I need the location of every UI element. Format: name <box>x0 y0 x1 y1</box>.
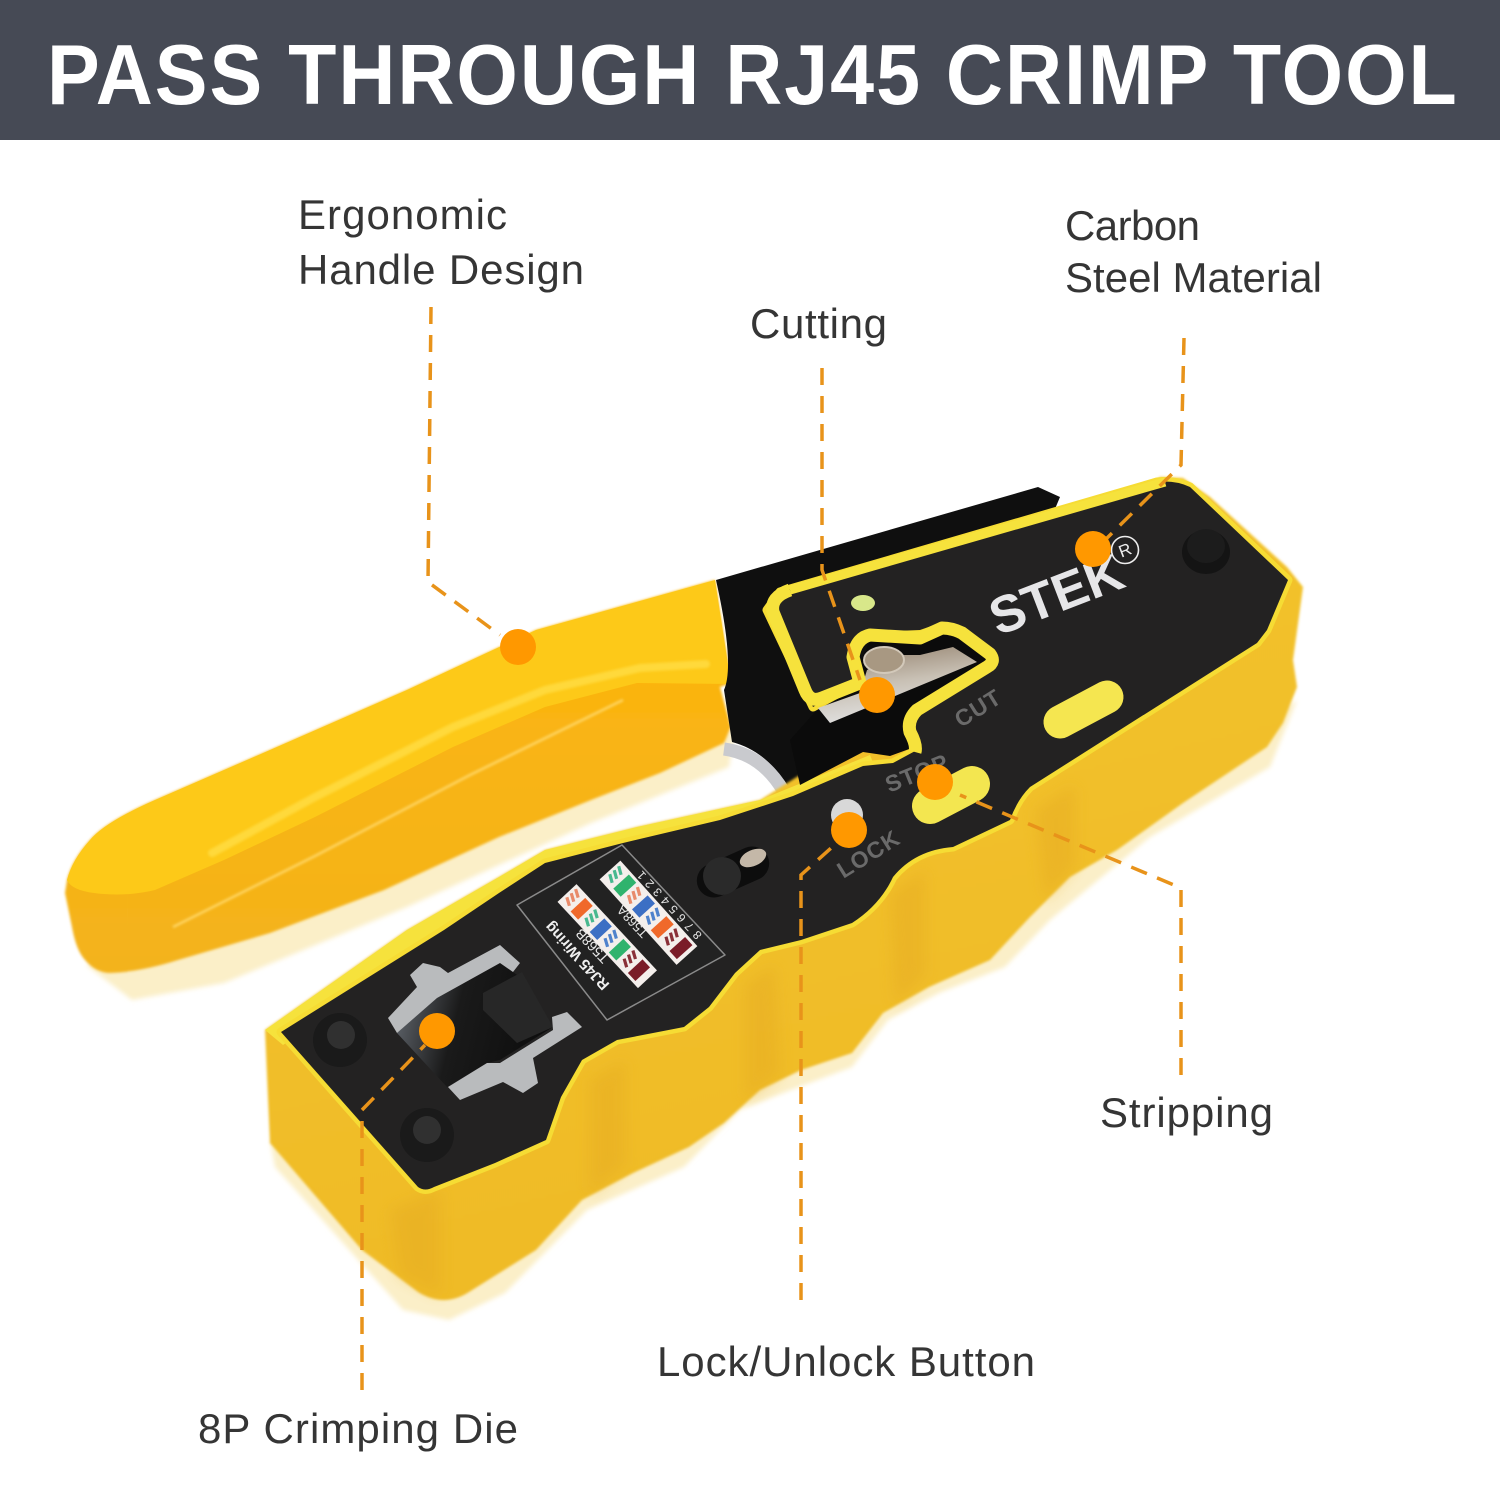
wire numbers: 87654321 <box>631 864 705 942</box>
green indicator light <box>851 595 875 611</box>
metal gap piece <box>724 749 784 792</box>
T568B colour strip <box>557 884 657 988</box>
cut window <box>790 632 990 785</box>
blade <box>818 647 977 723</box>
yellow rim of cut window <box>773 590 992 752</box>
pivot screw <box>864 647 904 673</box>
reflection under tool <box>86 700 1297 1320</box>
handle highlight <box>212 664 706 853</box>
lock button <box>831 799 863 831</box>
yellow rim of plate top <box>790 482 1165 590</box>
header band <box>0 0 1500 140</box>
callout: handle: Handle Design <box>298 246 584 293</box>
brand logo: STEK <box>982 543 1132 647</box>
die cavity <box>397 963 553 1087</box>
handle <box>65 580 731 973</box>
plate markings: LOCK <box>832 824 905 883</box>
upper die blade <box>388 945 520 1033</box>
title: PASS THROUGH RJ45 CRIMP TOOL <box>47 28 1457 123</box>
T568A colour strip <box>600 861 697 965</box>
crimp tool illustration <box>65 477 1303 1320</box>
slide window <box>1060 697 1107 722</box>
plate markings: CUT <box>950 684 1006 732</box>
callout: cutting: Cutting <box>750 300 887 347</box>
body side wall <box>265 477 1303 1300</box>
callout: stripping: Stripping <box>1100 1089 1273 1136</box>
top right screw <box>1182 529 1230 574</box>
callout: lock button <box>657 812 1035 1385</box>
callout: carbon steel: Carbon <box>1065 202 1200 249</box>
callout: lock button: Lock/Unlock Button <box>657 1338 1035 1385</box>
wiring diagram panel <box>517 845 725 1020</box>
callout: carbon steel: Steel Material <box>1065 254 1322 301</box>
handle crease <box>173 700 623 927</box>
lower die blade <box>448 1012 582 1100</box>
pivot dark area <box>716 487 1060 795</box>
brand logo: R <box>1116 539 1134 562</box>
plate screws <box>313 1013 454 1162</box>
callout: crimping die: 8P Crimping Die <box>198 1405 518 1452</box>
crimping die <box>388 945 582 1100</box>
die block <box>483 972 553 1043</box>
wall shading <box>390 785 1075 1295</box>
callout: carbon steel <box>1065 202 1322 567</box>
upper flange <box>67 580 731 894</box>
callout: crimping die <box>198 1013 518 1452</box>
T568A label: T568A <box>614 902 651 941</box>
plate markings: STOP <box>881 749 953 797</box>
strip button <box>930 784 972 806</box>
callout: cutting <box>750 300 895 713</box>
wiring caption: RJ45 Wiring <box>542 918 613 993</box>
lock slider <box>691 841 775 903</box>
callout: stripping <box>917 764 1273 1136</box>
callout: handle <box>298 191 584 665</box>
plate markings <box>832 684 1006 883</box>
T568B label: T568B <box>572 925 612 967</box>
top rim of lower jaw <box>265 755 880 1045</box>
black face plate <box>281 482 1288 1190</box>
callout: handle: Ergonomic <box>298 191 507 238</box>
